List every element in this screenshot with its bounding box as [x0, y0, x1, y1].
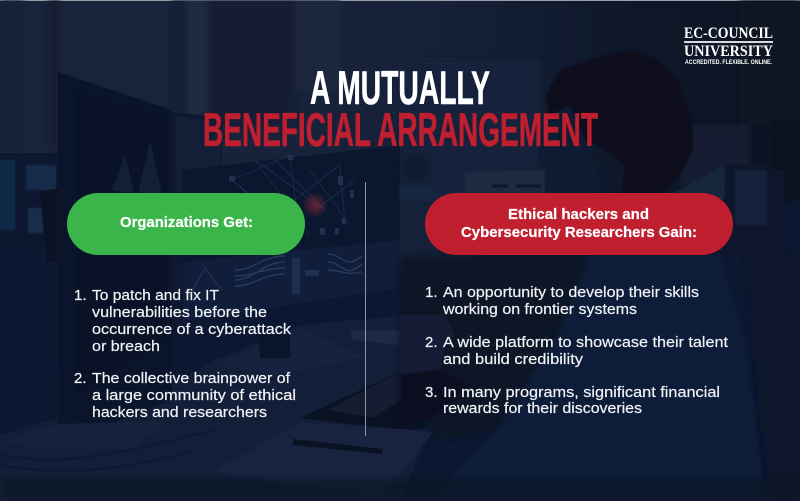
list: organizations benefits: or breach — [92, 338, 160, 355]
logo: EC-Council University: ACCREDITED. FLEXIBLE. ONLINE. — [685, 60, 772, 66]
keyboard — [300, 372, 475, 430]
list: researcher benefits: 3. — [425, 384, 438, 401]
far left screen and lower-left dark area — [0, 153, 60, 430]
logo: EC-Council University — [684, 25, 773, 66]
list: researcher benefits — [425, 284, 729, 417]
dark strip at bottom — [0, 478, 800, 501]
desk surface — [0, 316, 470, 501]
list: organizations benefits: 2. — [74, 370, 87, 387]
list: organizations benefits: To patch and fix IT — [92, 287, 219, 304]
centre monitor with network graph — [172, 112, 400, 330]
title — [203, 62, 598, 157]
green pill heading: Organizations Get: — [120, 214, 253, 231]
list: researcher benefits: rewards for their discoveries — [443, 400, 642, 417]
red pill heading: Ethical hackers and — [508, 206, 649, 223]
cables — [0, 365, 215, 471]
list: researcher benefits: working on frontier systems — [442, 301, 637, 318]
upper wall columns — [0, 0, 800, 200]
left monitor — [5, 72, 172, 449]
lower scene base — [0, 200, 800, 501]
list: organizations benefits: hackers and researchers — [92, 404, 267, 421]
person silhouette — [400, 50, 800, 501]
notebook and pen — [213, 422, 433, 495]
green pill heading — [67, 193, 305, 255]
divider — [365, 182, 366, 436]
list: organizations benefits: occurrence of a cyberattack — [92, 321, 292, 338]
list: organizations benefits: a large community of ethical — [92, 387, 296, 404]
list: researcher benefits: 2. — [425, 334, 438, 351]
list: organizations benefits: The collective brainpower of — [92, 370, 291, 387]
list: organizations benefits: vulnerabilities before the — [92, 304, 267, 321]
red pill heading — [425, 193, 733, 255]
list: researcher benefits: An opportunity to develop their skills — [443, 284, 699, 301]
list: researcher benefits: A wide platform to showcase their talent — [443, 334, 729, 351]
logo: EC-Council University: EC-COUNCIL — [684, 25, 773, 42]
panel: organizations get — [67, 193, 305, 421]
title: A MUTUALLY — [310, 62, 490, 115]
list: organizations benefits — [74, 287, 296, 421]
list: researcher benefits: In many programs, significant financial — [443, 384, 720, 401]
red pill heading: Cybersecurity Researchers Gain: — [461, 224, 697, 241]
list: researcher benefits: and build credibility — [443, 351, 584, 368]
panel: ethical hackers gain — [425, 193, 733, 417]
logo: EC-Council University: UNIVERSITY — [684, 43, 773, 60]
list: organizations benefits: 1. — [74, 287, 87, 304]
background right monitor — [670, 120, 800, 255]
list: researcher benefits: 1. — [425, 284, 438, 301]
